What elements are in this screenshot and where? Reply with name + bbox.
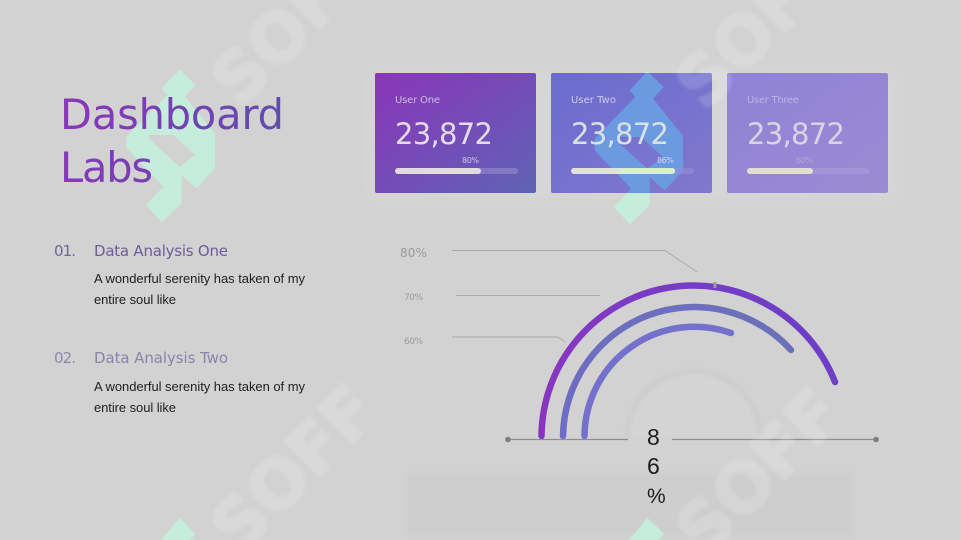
panel glow: chart area shadow bbox=[405, 472, 855, 536]
watermark: mint logo bottom left bbox=[161, 518, 196, 540]
chart: centre value wrapped vertically: % bbox=[647, 485, 666, 508]
chart: percentage labels: 60% bbox=[404, 337, 423, 347]
panel: User Two card: User Two bbox=[571, 95, 616, 106]
list item: Data Analysis One: A wonderful serenity has taken of my bbox=[94, 271, 306, 286]
chart: radial progress arcs bbox=[542, 282, 835, 438]
title: Labs bbox=[60, 143, 153, 192]
watermark: mint logo top right bbox=[595, 71, 683, 224]
chart: centre value wrapped vertically: 8 bbox=[647, 424, 660, 450]
chart: leader lines bbox=[452, 250, 697, 342]
title bbox=[60, 90, 284, 192]
panel glow: cards bbox=[368, 68, 898, 203]
arc: 60% bbox=[584, 327, 731, 436]
chart: percentage labels: 80% bbox=[400, 246, 427, 260]
panel: User One card: 23,872 bbox=[395, 117, 493, 151]
panel: User Two card: 86% bbox=[657, 156, 674, 165]
list item: Data Analysis One: 01. bbox=[54, 242, 76, 260]
chart: baseline with end dots bbox=[505, 437, 879, 442]
panel: User Three card: 60% bbox=[796, 156, 813, 165]
title: Dashboard bbox=[60, 90, 284, 139]
arc: 80% bbox=[542, 285, 835, 436]
list item: Data Analysis One bbox=[54, 242, 306, 307]
panel: User Three card: 23,872 bbox=[747, 117, 845, 151]
list item: Data Analysis Two: Data Analysis Two bbox=[94, 349, 228, 367]
chart: centre value wrapped vertically bbox=[647, 424, 666, 508]
list item: Data Analysis Two: entire soul like bbox=[94, 400, 176, 415]
watermark: mint logo top left bbox=[127, 69, 215, 222]
arc marker bbox=[714, 282, 716, 288]
list item: Data Analysis Two bbox=[54, 349, 306, 415]
chart: centre value wrapped vertically: 6 bbox=[647, 453, 660, 479]
chart: percentage labels bbox=[400, 246, 427, 347]
arc: 70% bbox=[563, 307, 791, 436]
list item: Data Analysis Two: 02. bbox=[54, 349, 76, 367]
list item: Data Analysis One: entire soul like bbox=[94, 292, 176, 307]
panel: User One card: User One bbox=[395, 95, 440, 106]
panel: User Three card bbox=[727, 73, 888, 193]
watermark: SOFF text repeated bbox=[196, 0, 858, 540]
panel: User Two card: 23,872 bbox=[571, 117, 669, 151]
list item: Data Analysis Two: A wonderful serenity has taken of my bbox=[94, 379, 306, 394]
chart: percentage labels: 70% bbox=[404, 293, 423, 303]
panel: User Three card: User Three bbox=[747, 95, 799, 106]
panel: User One card: 80% bbox=[462, 156, 479, 165]
panel: User One card bbox=[375, 73, 536, 193]
inner faint ring bbox=[627, 372, 760, 438]
watermark: mint logo bottom right bbox=[629, 518, 664, 540]
panel: User Two card bbox=[551, 73, 712, 193]
list item: Data Analysis One: Data Analysis One bbox=[94, 242, 228, 260]
